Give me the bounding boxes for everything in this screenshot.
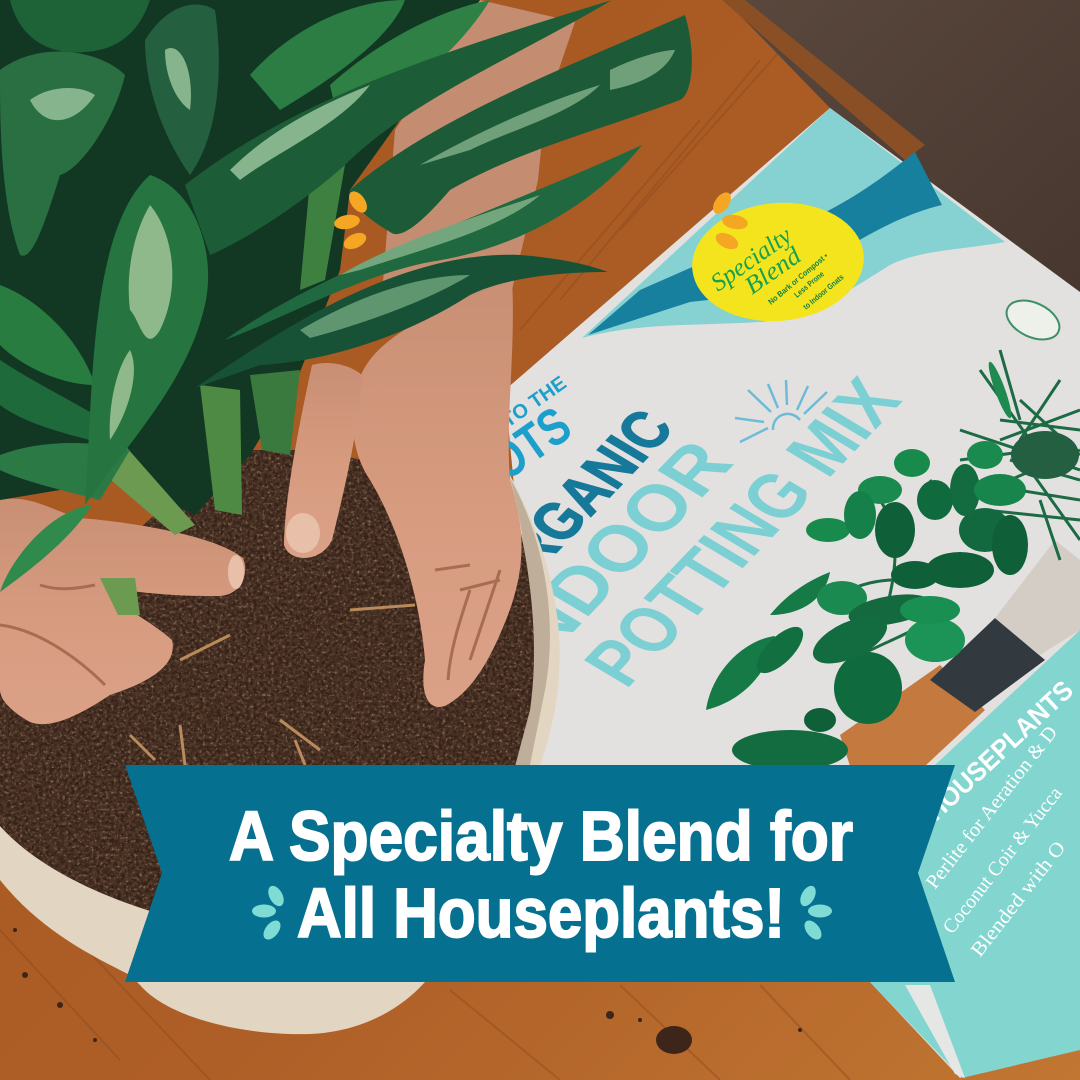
bag dark teal stripe xyxy=(588,152,942,335)
top right leaf xyxy=(350,15,692,234)
seal script title second line: Blend xyxy=(740,242,807,300)
icon: right teal drops xyxy=(797,883,832,943)
logo word: TO THE xyxy=(498,372,571,432)
top leaf xyxy=(10,0,150,52)
top leaf variegation xyxy=(30,48,370,180)
big central leaf xyxy=(85,175,208,505)
wood grain xyxy=(0,40,850,1080)
icon: left teal drops xyxy=(252,883,287,943)
side panel line one: Perlite for Aeration & D xyxy=(922,722,1062,893)
upper middle leaf xyxy=(250,0,405,110)
bag top teal band xyxy=(582,108,1005,338)
foliage shapes xyxy=(706,360,1079,770)
coir fibres xyxy=(130,605,415,765)
left low leaf two xyxy=(0,360,95,440)
bag lower crumple xyxy=(905,985,965,1078)
dark leaf mass xyxy=(0,0,480,515)
leaf variegation xyxy=(110,205,172,440)
variegation xyxy=(420,50,675,165)
product name organic: ORGANIC xyxy=(463,400,688,608)
potting mix bag xyxy=(463,108,1080,1078)
forearm behind the leaves xyxy=(380,0,575,320)
right hand in soil xyxy=(284,280,522,707)
silver planter xyxy=(995,540,1080,655)
table edge highlight xyxy=(722,0,925,160)
variegation xyxy=(300,275,470,338)
houseplant foliage xyxy=(0,0,692,615)
spilled soil crumbs xyxy=(13,928,802,1054)
thumb xyxy=(284,363,362,558)
bag certification badge xyxy=(1000,293,1066,347)
product name indoor: INDOOR xyxy=(477,428,750,681)
soil dark grain xyxy=(0,450,534,915)
finger creases xyxy=(435,565,500,680)
feathery fern stems xyxy=(840,350,1080,670)
headline line one: A Specialty Blend for xyxy=(229,797,853,875)
flowerpot xyxy=(0,475,560,1034)
left low leaf one xyxy=(0,285,95,385)
side panel line three: Blended with O xyxy=(967,837,1070,961)
yellow specialty blend seal xyxy=(687,196,869,328)
fingernail xyxy=(228,555,244,589)
stems xyxy=(100,165,345,615)
pot body xyxy=(0,475,560,1034)
seal claim line three: to Indoor Gnats xyxy=(802,272,846,312)
brand logo text xyxy=(480,372,582,492)
bag white body xyxy=(505,108,1080,1078)
finger shadow xyxy=(0,585,105,685)
dark floor xyxy=(725,0,1080,320)
lower long leaf xyxy=(195,255,608,388)
upper centre leaf xyxy=(330,0,490,130)
illustrated plant on bag xyxy=(706,350,1080,770)
dark plant band xyxy=(930,618,1045,712)
long leaf to top xyxy=(185,0,612,255)
logo roots word: OTS xyxy=(480,396,582,492)
banner xyxy=(125,765,955,982)
top left leaf xyxy=(145,4,219,175)
ribbon shape xyxy=(125,765,955,982)
orange drop accents right xyxy=(709,189,749,252)
headline line two: All Houseplants! xyxy=(297,874,785,952)
left hand pinching soil xyxy=(0,499,245,724)
left low leaf three xyxy=(0,443,130,500)
potting soil xyxy=(0,450,534,915)
seal script title: Specialty xyxy=(706,222,798,297)
pot shaded inner wall xyxy=(510,478,550,765)
soil light grain xyxy=(0,450,534,915)
side panel line two: Coconut Coir & Yucca xyxy=(939,783,1067,938)
terracotta pot xyxy=(840,665,985,766)
thumbnail xyxy=(286,513,320,553)
middle long leaf xyxy=(225,145,642,340)
variegation xyxy=(340,195,540,275)
seal claim line one: No Bark or Compost • xyxy=(767,251,830,307)
product name potting mix: POTTING MIX xyxy=(568,366,918,699)
upper left leaf xyxy=(0,51,125,256)
small front leaf xyxy=(0,505,92,592)
sun rays icon xyxy=(735,380,827,442)
seal claim line two: Less Prone xyxy=(793,269,826,300)
palm and fingers xyxy=(353,280,522,707)
bag teal side panel xyxy=(870,630,1080,1078)
orange drop accents left xyxy=(333,188,371,252)
